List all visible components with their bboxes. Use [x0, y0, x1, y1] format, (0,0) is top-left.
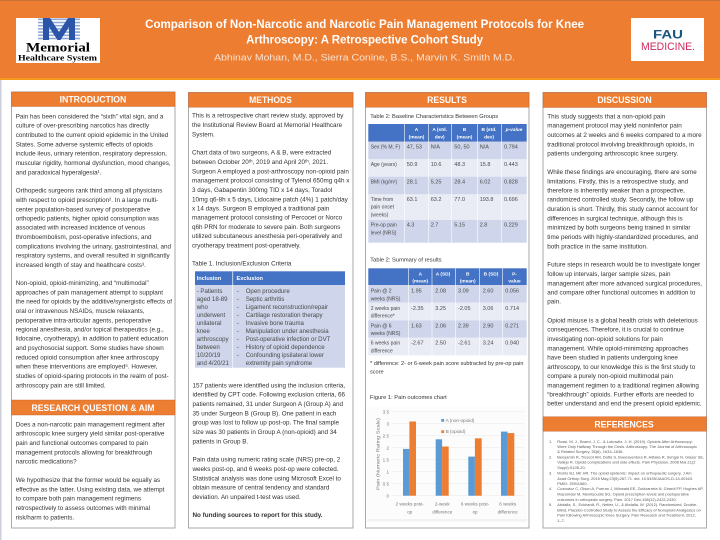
text: discussion paragraphs: better understand and end the present opioid epidemic.: [547, 401, 702, 408]
text: introduction paragraphs: Pain has been considered the “sixth” vital sign, and a: [16, 113, 164, 120]
chart legend: [441, 418, 475, 434]
text: discussion paragraphs: time periods with highly-standardized procedures, and: [547, 234, 699, 241]
table 1: inclusion and exclusion criteria: -: [237, 296, 239, 303]
table 2: baseline characteristics: pain onset: [371, 205, 395, 211]
figure 1: pain outcomes bar chart: 6 weeks: [499, 501, 517, 506]
table 2: summary of results: A: [419, 271, 423, 277]
table 2: baseline characteristics: N/A: [480, 145, 489, 151]
heading: references: REFERENCES: [594, 419, 654, 429]
table 1: inclusion and exclusion criteria: -: [237, 320, 239, 327]
logo: FAU Medicine: [631, 18, 704, 61]
text: discussion paragraphs: This study suggests that a non-opioid pain: [547, 113, 666, 120]
text: introduction paragraphs: arthroscopy pain are still limited.: [16, 382, 106, 389]
table 2: baseline characteristics: 6.02: [480, 180, 490, 186]
text: discussion paragraphs: consequences. Therefore, it is crucial to continue: [547, 327, 685, 334]
text: introduction paragraphs: [15, 113, 172, 389]
table 1: inclusion and exclusion criteria: -: [237, 344, 239, 351]
text: references list: 4.: [549, 486, 552, 491]
text: references list: 1–7.: [557, 518, 565, 523]
text: introduction paragraphs: studies of opioid-sparing protocols in the realm of post-: [16, 373, 169, 380]
text: discussion paragraphs: “breakthrough” opioids. Further efforts are needed to: [547, 391, 694, 398]
table 2: summary of results: A (SD): [436, 271, 451, 277]
table 1: inclusion and exclusion criteria: arthroscopy: [197, 336, 229, 343]
table 2: summary of results: 3.24: [483, 341, 493, 347]
text: discussion paragraphs: [547, 113, 702, 408]
table 2: summary of results: 0.056: [505, 289, 519, 295]
table 2: baseline characteristics: 28.4: [454, 180, 465, 186]
text: study design: cryotherapy treatment post-operatively.: [192, 242, 301, 249]
table 2: baseline characteristics: 0.443: [504, 162, 518, 168]
figure 1: pain outcomes bar chart: op: [407, 509, 413, 514]
text: research question: [16, 421, 165, 521]
table 2: summary of results: B (SD): [484, 271, 499, 277]
text: study design: Table 1. Inclusion/Exclusion Criteria: [192, 261, 292, 268]
table 2: baseline characteristics: 193.8: [480, 197, 493, 203]
table 1: inclusion and exclusion criteria: Ligament reconstruction/repair: [246, 304, 328, 311]
table 2: baseline characteristics: B (std.: [482, 127, 496, 133]
chart legend: A (non-opioid): [446, 418, 475, 423]
heading: research question and aim: RESEARCH QUESTION & AIM: [32, 403, 154, 413]
title: Comparison of Non-Narcotic and Narcotic Pain Management Protocols for Knee: [145, 18, 585, 31]
table 2: baseline characteristics: N/A: [431, 145, 440, 151]
heading: results: RESULTS: [427, 95, 467, 105]
table 1: inclusion and exclusion criteria: unilateral: [197, 320, 221, 327]
figure 1: pain outcomes bar chart: 2 weeks post-: [396, 501, 424, 506]
figure 1: pain outcomes bar chart: Figure 1: Pain outcomes chart: [370, 395, 447, 401]
text: references list: [549, 439, 704, 523]
text: introduction paragraphs: approaches of pain management attempt to supplant: [16, 289, 163, 296]
table 1: inclusion and exclusion criteria: Cartilage restoration therapy: [246, 312, 324, 319]
text: references list: 3.: [549, 470, 552, 476]
text: patient selection and analysis: identified by CPT code. Following exclusion criteria, 66: [192, 392, 345, 399]
table 2: summary of results: -2.61: [458, 341, 471, 347]
table 2: baseline characteristics: 28.1: [407, 180, 417, 186]
text: discussion paragraphs: traditional protocol involving breakthrough opioids, in: [547, 141, 694, 148]
text: discussion paragraphs: differences in surgical technique, although this is: [547, 215, 683, 222]
text: references list: Were Only Halfway Through the Crisis. Arthroscopy: The Journal of Arthroscopic: [557, 444, 697, 449]
text: introduction paragraphs: associated with increased incidence of venous: [16, 225, 145, 232]
text: discussion paragraphs: and compare other functional outcomes in addition to: [547, 289, 696, 296]
table 2: summary of results: difference: [371, 348, 393, 354]
text: study design: This is a retrospective chart review study, approved by: [192, 113, 344, 120]
text: research question: risk/harm to patients.: [16, 514, 74, 521]
title: [145, 18, 585, 47]
text: introduction paragraphs: center population-based survey of postoperative: [16, 206, 151, 213]
text: references list: Cozowicz C, Olson A, Poeran J, Mörwald EE, Zubizarreta N, Girardi FP, Hughes AP,: [557, 486, 704, 491]
table 1: inclusion and exclusion criteria: -: [237, 312, 239, 319]
text: references list: outcomes in orthopedic surgery. Pain. 2017 Dec;158(12):2422-2430.: [557, 497, 677, 502]
table 2: summary of results: 2.39: [458, 323, 469, 329]
text: discussion paragraphs: management regimen to a traditional regimen allowing: [547, 382, 699, 389]
figure 1: pain outcomes bar chart: difference: [498, 509, 518, 514]
text: references list: Acad Orthop Surg. 2015 May;23(5):267-71. doi: 10.5435/JAAOS-D-14-00163.: [557, 476, 693, 481]
heading: research question and aim: [12, 400, 175, 415]
table 1: inclusion and exclusion criteria: Invasive bone trauma: [246, 320, 305, 327]
table 2: baseline characteristics: 48.3: [454, 162, 465, 168]
figure 1: pain outcomes bar chart: 0: [386, 493, 389, 498]
text: discussion paragraphs: minimized by both surgeons being trained in similar: [547, 225, 690, 232]
text: research question: pain and functional outcomes compared to pain: [16, 440, 149, 447]
table 1: inclusion and exclusion criteria: -: [237, 288, 239, 295]
text: discussion paragraphs: randomized controlled study. Secondly, the follow up: [547, 197, 694, 204]
table 2: summary of results: -2.67: [411, 341, 424, 347]
text: introduction paragraphs: increased length of stay and healthcare costs³.: [16, 262, 146, 269]
text: introduction paragraphs: oral or intravenous NSAIDs, muscle relaxants,: [16, 308, 145, 315]
table 2: baseline characteristics: 47, 53: [407, 145, 422, 151]
logo: FAU Medicine: FAU: [653, 28, 683, 42]
table 1: inclusion and exclusion criteria: 10/20/19: [197, 352, 221, 359]
text: patient selection and analysis: patients remained, 31 under Surgeon A (Group A) and: [192, 401, 344, 408]
text: research question: management protocols allowing for breakthrough: [16, 449, 153, 456]
text: references list: Benyamin R, Trescot AM, Datta S, Buenaventura R, Adlaka R, Sehgal N, Glaser SE,: [557, 454, 704, 460]
heading: results: [366, 92, 529, 107]
table footnote: score: [370, 370, 384, 376]
text: references list: Vallejo R. Opioid complications and side effects. Pain Physician. 2008 Mar;11(2: [557, 460, 695, 464]
figure 1: pain outcomes bar chart: 2.5: [383, 433, 389, 438]
text: study design: Surgeon A employed a post-arthroscopy non-opioid pain: [192, 168, 349, 175]
table 2: summary of results: 1.95: [411, 289, 422, 295]
text: patient selection and analysis: size was 30 patients in Group A (non-opioid) and 34: [192, 429, 337, 436]
table 2: baseline characteristics: 0.229: [504, 223, 518, 229]
table 2: baseline characteristics: 0.794: [504, 145, 518, 151]
text: introduction paragraphs: muscular rigidity, hormonal dysfunction, mood changes,: [16, 160, 171, 167]
panel: introduction: [12, 92, 175, 528]
table 2: baseline characteristics: 50, 50: [454, 145, 470, 151]
table 2: baseline characteristics: (mean): [409, 135, 425, 141]
figure 1: pain outcomes bar chart: 1.5: [383, 457, 389, 462]
text: references list: Rossi, M. J., Brand, J. C., & Lubowitz, J. H. (2019). Opioids After Arthroscopy:: [557, 439, 693, 444]
text: references list: 2.: [549, 454, 552, 460]
table 1: inclusion and exclusion criteria: History of opioid dependence: [246, 344, 325, 351]
text: study design: Chart data of two surgeons, A & B, were extracted: [192, 150, 332, 157]
table 2: summary of results: 3.25: [435, 306, 446, 312]
table 2: summary of results: 2 weeks pain: [371, 306, 400, 312]
text: references list: Mazumdar M, Memtsoudis SG. Opioid prescription levels and postoperative: [557, 492, 690, 496]
table 2: baseline characteristics: 2.7: [431, 223, 438, 229]
heading: discussion: DISCUSSION: [597, 95, 652, 105]
table 1: inclusion and exclusion criteria: Post-operative infection or DVT: [246, 336, 331, 343]
text: patient selection and analysis: group was lost to follow up post-op. The final sample: [192, 420, 340, 427]
text: research question: narcotic medications?: [16, 459, 77, 466]
figure 1: pain outcomes bar chart: 2: [386, 445, 389, 450]
text: discussion paragraphs: therefore is inherently weaker than a prospective,: [547, 187, 685, 194]
authors: Abhinav Mohan, M.D., Sierra Conine, B.S., Marvin K. Smith M.D.: [214, 52, 515, 62]
table 2: summary of results: value: [508, 279, 521, 285]
table 2: baseline characteristics: dev): [435, 135, 445, 141]
table 2: baseline characteristics: Age (years): [371, 162, 397, 168]
text: patient selection and analysis: patients in Group B.: [192, 438, 248, 445]
text: patient selection and analysis: Pain data using numeric rating scale (NRS) pre-op, 2: [192, 457, 341, 464]
table 2: baseline characteristics: 4.3: [407, 223, 414, 229]
heading: introduction: INTRODUCTION: [60, 94, 126, 104]
panel: discussion: [543, 92, 706, 528]
figure 1: pain outcomes bar chart: 3: [386, 421, 389, 426]
text: introduction paragraphs: thromboembolism, post-operative infections, and: [16, 234, 152, 241]
text: introduction paragraphs: when these interventions are employed⁵. However,: [15, 364, 158, 371]
text: study design: [192, 113, 350, 268]
text: discussion paragraphs: management protocol may yield noninferior pain: [547, 123, 682, 130]
table 1: inclusion and exclusion criteria: aged 18-89: [197, 296, 228, 303]
table 2: baseline characteristics: A: [415, 127, 419, 133]
table 2: baseline characteristics: 2.8: [480, 223, 487, 229]
table 2: baseline characteristics: 5.25: [431, 180, 441, 186]
table 2: baseline characteristics: (weeks): [371, 212, 389, 218]
text: discussion paragraphs: follow up intervals, larger sample sizes, pain: [547, 271, 671, 278]
table 2: baseline characteristics: 5.15: [454, 223, 465, 229]
table 1: inclusion and exclusion criteria: Inclusion: [197, 276, 222, 282]
text: patient selection and analysis: [192, 382, 345, 519]
text: study design: x 14 days. Surgeon B employed a traditional pain: [192, 205, 330, 212]
table 2: baseline characteristics: 50.9: [407, 162, 417, 168]
table 2: baseline characteristics: 0.696: [504, 197, 518, 203]
title: Arthroscopy: A Retrospective Cohort Study: [246, 34, 484, 47]
table 1: inclusion and exclusion criteria: underwent: [197, 312, 225, 319]
text: introduction paragraphs: the need for opioids by the additive/synergistic effects of: [16, 299, 172, 306]
text: patient selection and analysis: 35 under Surgeon B (Group B). One patient in each: [192, 410, 337, 417]
text: study design: q6h PRN for moderate to severe pain. Both surgeons: [192, 224, 340, 231]
text: discussion paragraphs: Future steps in research would be to investigate longer: [547, 262, 700, 269]
figure 1: pain outcomes bar chart: 1: [386, 469, 389, 474]
text: discussion paragraphs: compare a purely non-opioid multimodal pain: [547, 373, 673, 380]
text: patient selection and analysis: deviation. An unpaired t-test was used.: [192, 494, 301, 501]
panel: methods: [188, 92, 353, 528]
table 1: inclusion and exclusion criteria: Manipulation under anesthesia: [246, 328, 329, 335]
text: introduction paragraphs: contributed to the current opioid epidemic in the United: [16, 132, 169, 139]
text: patient selection and analysis: obtain measure of central tendency and standard: [192, 485, 330, 492]
text: discussion paragraphs: duration is short. Thirdly, this study cannot account for: [547, 206, 698, 213]
text: discussion paragraphs: While these findings are encouraging, there are some: [547, 169, 697, 176]
figure 1: pain outcomes bar chart: op: [472, 509, 478, 514]
table 2: baseline characteristics: 15.8: [480, 162, 490, 168]
text: study design: between October 20ᵗʰ, 2019 and April 20ᵗʰ, 2021.: [192, 159, 328, 166]
table 2: baseline characteristics: (mean): [457, 135, 473, 141]
table 1: inclusion and exclusion criteria: knee: [197, 328, 211, 335]
table 2: baseline characteristics: BMI (kg/m²): [371, 180, 397, 186]
logo: Memorial Healthcare System: Healthcare System: [18, 52, 97, 62]
table 2: summary of results: Table 2: Summary of results: [370, 258, 442, 264]
table 2: summary of results: -2.05: [458, 306, 471, 312]
text: study design: utilized subcutaneous anesthesia peri-operatively and: [192, 233, 342, 240]
table 1: inclusion and exclusion criteria: who: [196, 304, 208, 311]
heading: references: [543, 417, 706, 431]
logo: FAU Medicine: MEDICINE.: [641, 41, 695, 53]
text: references list: 1.: [549, 439, 552, 444]
table 1: inclusion and exclusion criteria: [195, 271, 345, 368]
text: discussion paragraphs: management after more advanced surgical procedures,: [547, 280, 702, 287]
text: references list: & Related Surgery, 35(6), 1633–1636.: [557, 449, 624, 454]
table 2: summary of results: 3.06: [483, 306, 493, 312]
text: research question: arthroscopic knee surgery yield similar post-operative: [16, 431, 165, 438]
table 1: inclusion and exclusion criteria: -: [237, 304, 239, 311]
table 2: baseline characteristics: p-value: [505, 127, 523, 133]
text: introduction paragraphs: perioperative intra-articular agents, perioperative: [16, 317, 152, 324]
table 2: summary of results: 2.90: [483, 323, 493, 329]
text: introduction paragraphs: and paradoxical hyperalgesia¹.: [16, 169, 102, 176]
header banner: [0, 0, 720, 80]
table 2: baseline characteristics: A (std.: [432, 127, 447, 133]
figure 1: pain outcomes bar chart: 2-week: [435, 501, 450, 506]
table 2: summary of results: (mean): [460, 279, 476, 285]
table 1: inclusion and exclusion criteria: -: [237, 352, 239, 359]
text: introduction paragraphs: lidocaine, cryotherapy), in addition to patient education: [16, 336, 168, 343]
figure 1: pain outcomes bar chart: 6 weeks post-: [461, 501, 490, 506]
table 1: inclusion and exclusion criteria: -: [237, 328, 239, 335]
text: references list: Abdalla, S., Eckhardt, R., Netter, U., & Abdalla, W. (2012). Randomized, Double-: [557, 502, 698, 507]
figure 1: pain outcomes bar chart: Pain (Numeric Rating Scale): [375, 417, 380, 490]
text: introduction paragraphs: Non-opioid, opioid-minimizing, and “multimodal”: [16, 280, 149, 287]
text: introduction paragraphs: with respect to opioid prescription². In a large multi-: [15, 197, 158, 204]
text: study design: System.: [192, 131, 215, 138]
table 2: summary of results: 0.940: [505, 341, 519, 347]
table 1: inclusion and exclusion criteria: Septic arthritis: [246, 296, 284, 303]
heading: introduction: [12, 92, 175, 106]
table 2: summary of results: difference*: [371, 313, 395, 319]
table 2: summary of results: 2.50: [435, 341, 446, 347]
table 1: inclusion and exclusion criteria: - Patients: [197, 288, 222, 295]
table 2: baseline characteristics: dev): [484, 135, 494, 141]
table 2: summary of results: weeks (NRS): [371, 331, 401, 337]
table 2: summary of results: (mean): [412, 279, 429, 285]
table 2: summary of results: P-: [512, 271, 517, 277]
table 2: summary of results: B: [466, 271, 470, 277]
figure 1: pain outcomes bar chart: 0.5: [383, 481, 389, 486]
table footnote: * difference: 2- or 6-week pain score subtracted by pre-op pain: [370, 361, 523, 367]
text: introduction paragraphs: States. Some adverse systemic effects of opioids: [16, 141, 153, 148]
heading: methods: [188, 92, 353, 107]
table 2: baseline characteristics: Sex (% M, F): [371, 145, 400, 151]
text: study design: management protocol consisting of Tylenol 650mg q4h x: [192, 178, 350, 185]
table 2: summary of results: 0.271: [505, 323, 519, 329]
table 2: summary of results: 3.09: [458, 289, 469, 295]
table 2: summary of results: weeks (NRS): [371, 296, 401, 302]
text: discussion paragraphs: both practice in the same institution.: [547, 243, 648, 250]
text: discussion paragraphs: arthroscopy, to our knowledge this is the first study to: [547, 364, 696, 371]
table 2: baseline characteristics: B: [463, 127, 467, 133]
table 2: baseline characteristics: 63.1: [407, 197, 417, 203]
panel: results: [366, 92, 529, 528]
text: introduction paragraphs: orthopedic patients, higher opioid consumption was: [16, 216, 159, 223]
text: introduction paragraphs: and psychosocial support. Some studies have shown: [16, 345, 164, 352]
text: study design: management protocol consisting of Percocet or Norco: [192, 215, 343, 222]
text: research question: retrospectively to assess outcomes with minimal: [16, 505, 150, 512]
text: discussion paragraphs: pain.: [547, 299, 561, 306]
text: patient selection and analysis: weeks post-op, and 6 weeks post-op were collected.: [192, 466, 339, 473]
text: discussion paragraphs: management. While opioid-minimizing approaches: [547, 345, 688, 352]
figure 1: pain outcomes bar chart: difference: [432, 509, 453, 514]
text: study design: 3 days, Gabapentin 300mg TID x 14 days, Toradol: [192, 187, 332, 194]
text: patient selection and analysis: 157 patients were identified using the inclusion criteria,: [192, 382, 345, 389]
table 2: baseline characteristics: Pre-op pain: [371, 223, 397, 229]
table 2: baseline characteristics: level (NRS): [371, 230, 397, 236]
text: discussion paragraphs: have been studied in patients undergoing knee: [547, 355, 678, 362]
logo: Memorial Healthcare System: Memorial: [26, 40, 90, 54]
text: introduction paragraphs: respiratory systems, and overall resulted in significantly: [16, 253, 171, 260]
table 1: inclusion and exclusion criteria: Open procedure: [246, 288, 290, 295]
table 2: baseline characteristics: Table 2: Baseline Characteristics Between Groups: [370, 114, 498, 120]
table 2: summary of results: Pain @ 2: [371, 289, 392, 295]
table 1: inclusion and exclusion criteria: between: [197, 344, 220, 351]
table 2: summary of results: 2.60: [483, 289, 493, 295]
table 2: summary of results: Pain @ 6: [371, 323, 392, 329]
table 2: summary of results: -2.35: [411, 306, 424, 312]
text: study design: 10mg q6-8h x 5 days, Lidocaine patch (4%) 1 patch/day: [192, 196, 349, 203]
text: discussion paragraphs: outcomes at 2 weeks and 6 weeks compared to a more: [547, 132, 702, 139]
text: introduction paragraphs: complications involving the urinary, gastrointestinal, and: [16, 243, 171, 250]
table 2: baseline characteristics: 63.2: [431, 197, 441, 203]
text: patient selection and analysis: No funding sources to report for this study.: [192, 512, 323, 519]
table 2: baseline characteristics: Time from: [371, 197, 393, 203]
heading: methods: METHODS: [249, 95, 292, 105]
table 1: inclusion and exclusion criteria: and 4/20/21: [197, 360, 230, 367]
table 1: inclusion and exclusion criteria: Exclusion: [236, 276, 264, 282]
text: introduction paragraphs: Orthopedic surgeons rank third among all physicians: [16, 188, 162, 195]
chart legend: B (opioid): [446, 429, 466, 434]
text: discussion paragraphs: investigating non-opioid solutions for pain: [547, 336, 663, 343]
text: research question: We hypothesize that the former would be equally as: [16, 477, 160, 484]
table 2: baseline characteristics: [368, 114, 527, 243]
text: discussion paragraphs: patients undergoing arthroscopic knee surgery.: [547, 151, 678, 158]
text: introduction paragraphs: regional anesthesia, and/or topical therapeutics (e.g.,: [16, 326, 164, 333]
text: discussion paragraphs: limitations. Firstly, this is a retrospective study, and: [547, 178, 689, 185]
text: research question: effective as the latter. Using existing data, we attempt: [16, 486, 165, 493]
text: discussion paragraphs: Opioid misuse is a global health crisis with deleterious: [547, 317, 698, 324]
text: references list: Suppl):S105-20.: [557, 465, 586, 470]
text: introduction paragraphs: reduced opioid consumption after knee arthroscopy: [16, 354, 160, 361]
text: research question: to compare both pain management regimens: [16, 496, 141, 503]
text: references list: PMID: 25911660.: [557, 481, 588, 486]
table 1: inclusion and exclusion criteria: Confounding ipsilateral lower: [246, 352, 324, 359]
table 1: inclusion and exclusion criteria: extremity pain syndrome: [246, 360, 313, 367]
table footnote: [370, 361, 523, 376]
heading: discussion: [543, 92, 706, 108]
table 2: summary of results: 2.08: [435, 289, 446, 295]
text: references list: Blind, Placebo-Controlled Study to Assess the Efficacy of Nonopioid Analgesics on: [557, 508, 701, 512]
text: introduction paragraphs: culture of over-prescribing narcotics has directly: [16, 123, 150, 130]
figure 1: pain outcomes bar chart: [367, 395, 527, 522]
text: references list: Pain following Arthroscopic Knee Surgery. Pain Research and Treatment, 2012,: [557, 512, 696, 518]
table 2: baseline characteristics: 77.0: [454, 197, 465, 203]
text: research question: Does a non-narcotic pain management regiment after: [16, 421, 165, 428]
text: introduction paragraphs: include ileus, urinary retention, respiratory depression,: [16, 151, 167, 158]
table 2: baseline characteristics: 10.6: [431, 162, 441, 168]
logo: Memorial Healthcare System: [16, 18, 100, 63]
text: study design: the Institutional Review Board at Memorial Healthcare: [192, 122, 343, 129]
figure 1: pain outcomes bar chart: 3.5: [383, 409, 389, 414]
table 2: summary of results: 0.714: [505, 306, 519, 312]
text: patient selection and analysis: Statistical analysis was done using Microsoft Excel to: [192, 475, 341, 482]
text: references list: Morris BJ, Mir HR. The opioid epidemic: impact on orthopaedic surgery. J Am: [557, 470, 692, 476]
table 2: summary of results: 2.06: [435, 323, 446, 329]
table 2: summary of results: 6 weeks pain: [371, 341, 400, 347]
table 1: inclusion and exclusion criteria: -: [237, 336, 239, 343]
table 2: summary of results: [368, 258, 527, 376]
table 2: summary of results: 1.63: [411, 323, 422, 329]
text: references list: 5.: [549, 502, 552, 507]
table 2: baseline characteristics: 0.828: [504, 180, 518, 186]
